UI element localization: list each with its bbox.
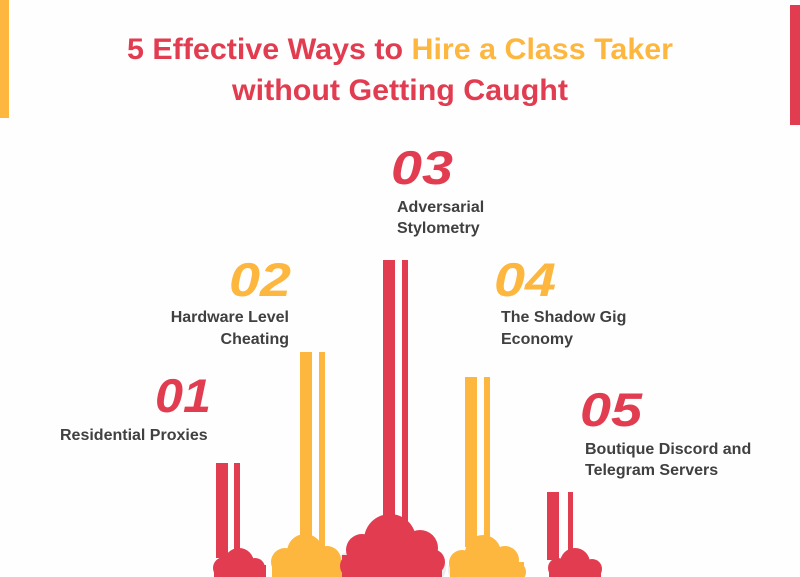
- item 04: The Shadow Gig: [501, 309, 626, 326]
- rocket 04: [449, 377, 526, 577]
- item 05: Boutique Discord and: [585, 441, 751, 458]
- item 05: Telegram Servers: [585, 462, 718, 479]
- left accent bar: [0, 0, 9, 118]
- item 05: 05: [580, 383, 643, 436]
- title: without Getting Caught: [231, 74, 568, 107]
- item 05: [580, 383, 751, 479]
- item 01: [60, 369, 211, 444]
- right accent bar: [790, 5, 800, 125]
- rocket 05: [547, 492, 602, 577]
- rocket 02: [271, 352, 350, 577]
- item 02: Cheating: [221, 331, 289, 348]
- item 03: [391, 141, 484, 237]
- item 04: [494, 253, 626, 348]
- title: [127, 33, 673, 107]
- item 01: 01: [155, 369, 211, 422]
- item 01: Residential Proxies: [60, 427, 208, 444]
- item 03: Adversarial: [397, 199, 484, 216]
- item 02: [171, 253, 291, 348]
- item 03: 03: [391, 141, 453, 194]
- item 04: Economy: [501, 331, 573, 348]
- item 02: Hardware Level: [171, 309, 289, 326]
- rocket 03: [340, 260, 445, 577]
- title: 5 Effective Ways to Hire a Class Taker: [127, 33, 673, 66]
- grey background clouds: [318, 552, 476, 577]
- item 04: 04: [494, 253, 556, 306]
- item 03: Stylometry: [397, 220, 480, 237]
- rocket 01: [213, 463, 266, 577]
- item 02: 02: [229, 253, 291, 306]
